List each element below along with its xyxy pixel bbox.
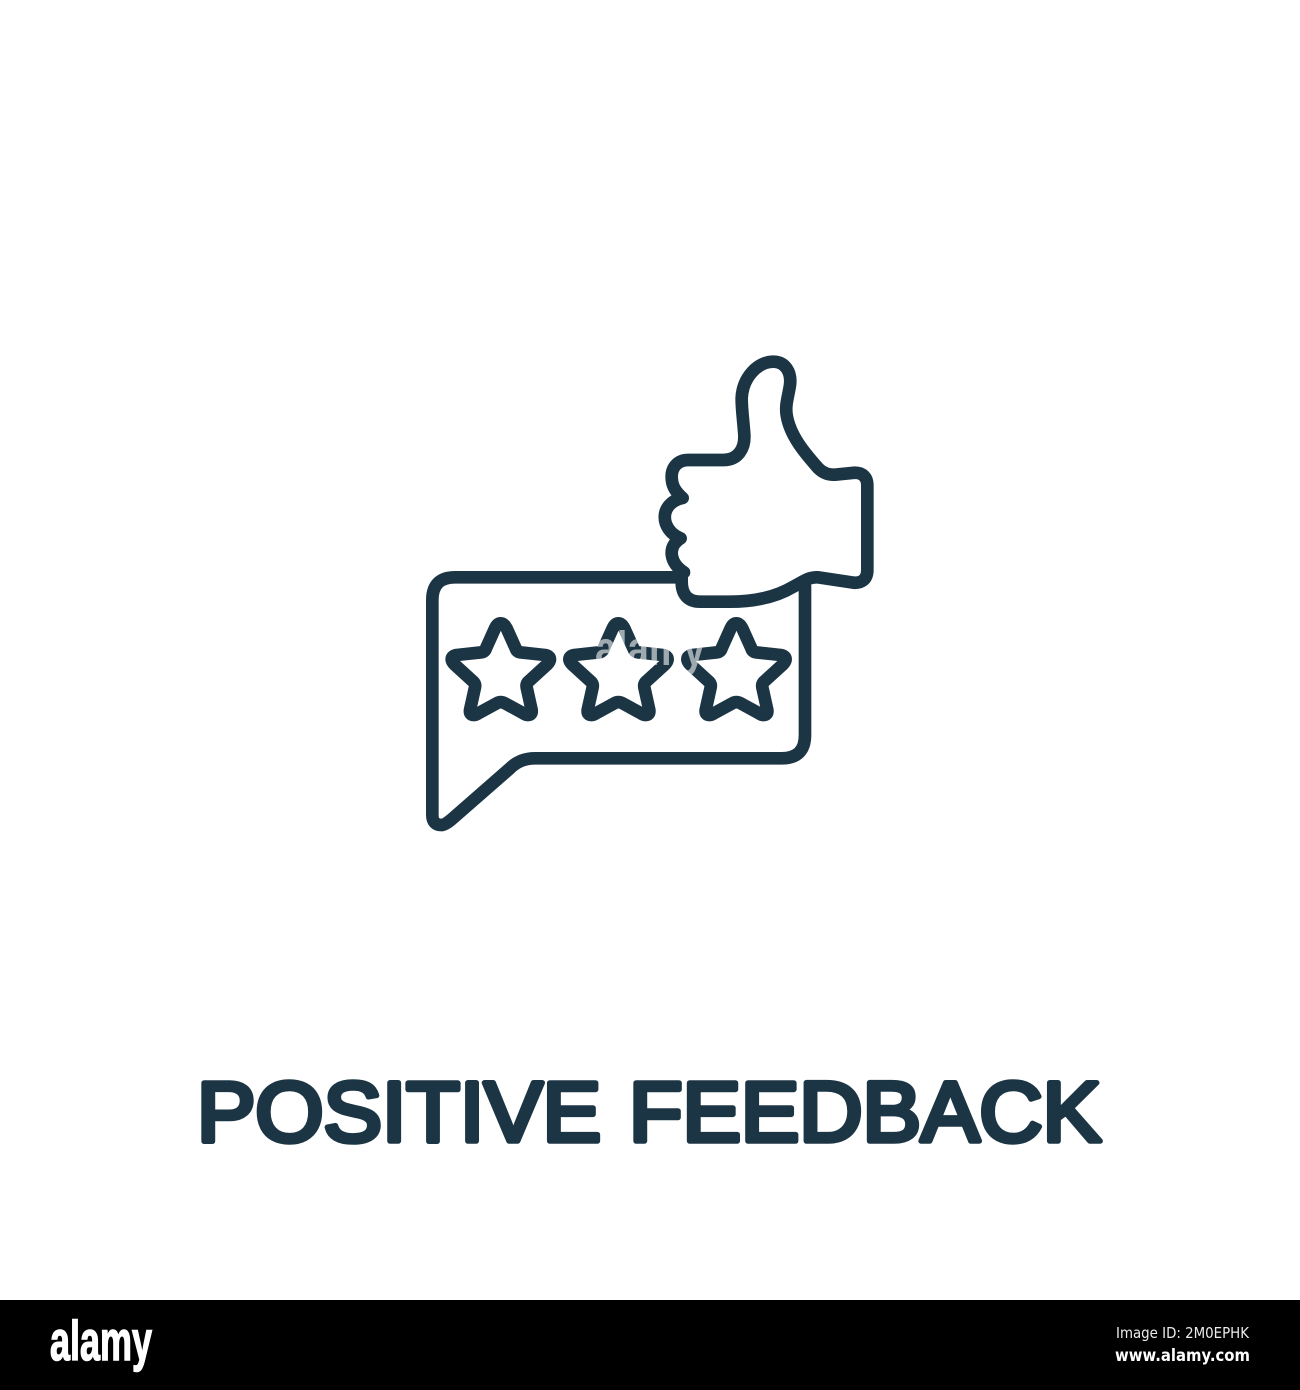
footer bar [0,1300,1300,1390]
watermark on icon: alamy [595,623,705,676]
title word: positive: POSITIVE [197,1065,601,1159]
infographic canvas [0,355,1300,1390]
title [197,1065,1101,1159]
footer logo: alamy [50,1309,152,1372]
title word: feedback: FEEDBACK [629,1065,1101,1159]
footer website: www.alamy.com [1115,1346,1250,1366]
footer image id: Image ID: 2M0EPHK [1116,1324,1250,1342]
icon: speech bubble [432,577,805,825]
icon: speech bubble with three stars and thumbs up [432,362,867,825]
icon: star 1 [452,623,550,715]
icon: star 3 [687,623,786,715]
icon: thumbs up hand [665,362,867,602]
icon: star 2 [569,623,668,715]
